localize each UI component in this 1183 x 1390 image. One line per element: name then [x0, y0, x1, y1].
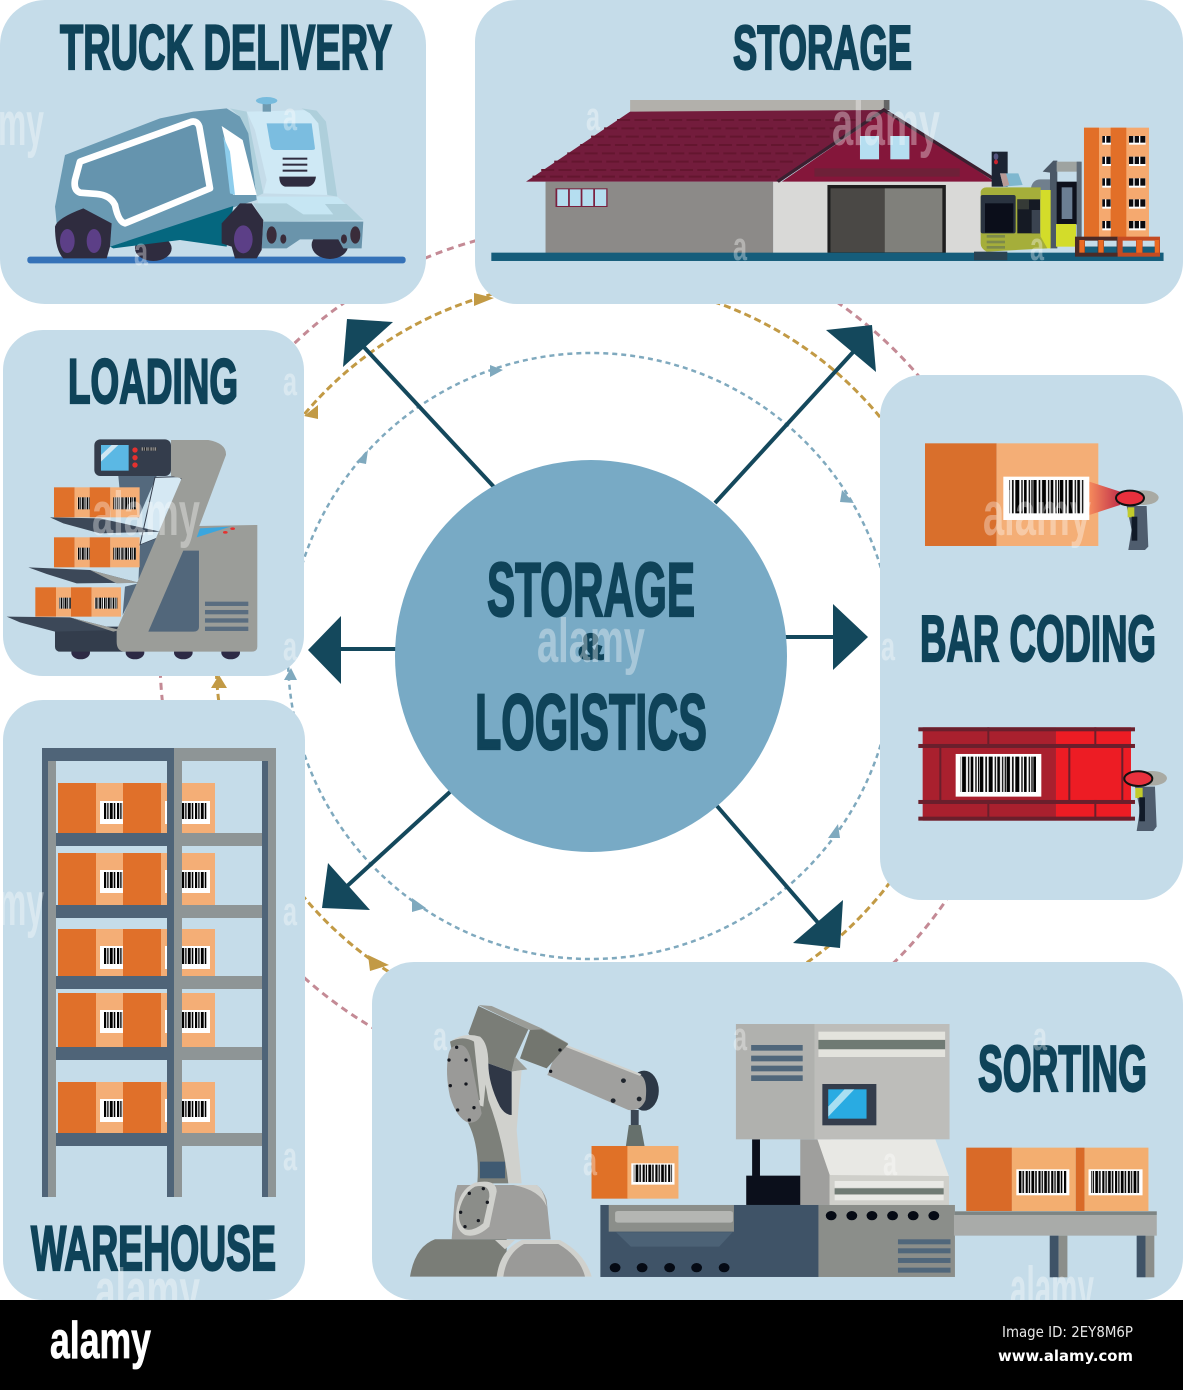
panel background: [372, 962, 1183, 1300]
panel: storage: [475, 0, 1183, 304]
heading: truck delivery: TRUCK DELIVERY: [60, 13, 392, 83]
arrow: to bar coding: [785, 604, 868, 670]
arrow: to warehouse: [322, 791, 451, 910]
panel: bar coding: [880, 375, 1183, 900]
watermarks: alamy: [95, 1257, 200, 1326]
arrow: to loading: [308, 616, 397, 684]
watermarks: a: [283, 1135, 297, 1179]
footer url: www.alamy.com: [998, 1347, 1133, 1365]
watermarks: my: [0, 90, 44, 159]
icon: autonomous truck: [27, 97, 406, 263]
watermarks: a: [883, 1140, 897, 1184]
central hub: [395, 460, 787, 852]
footer logo: alamy: [50, 1312, 151, 1370]
text: alamy: [1010, 1255, 1094, 1324]
watermarks: alamy: [983, 480, 1091, 549]
icon: sorting machine: [600, 1024, 955, 1277]
hub title: &: [578, 626, 604, 667]
arrow: to truck delivery: [343, 319, 494, 487]
watermarks: a: [881, 625, 895, 669]
heading: warehouse: WAREHOUSE: [31, 1214, 276, 1284]
icon: robot arm body: [410, 1005, 592, 1277]
panel background: [3, 330, 304, 676]
panel background: [475, 0, 1183, 304]
icon: box held by robot: [592, 1146, 678, 1199]
watermarks: a: [586, 95, 600, 139]
watermarks: alamy: [92, 480, 200, 549]
watermarks: my: [0, 870, 44, 939]
icon: red container being scanned: [918, 727, 1167, 831]
watermarks: alamy: [537, 607, 645, 676]
icon: warehouse building: [491, 100, 1164, 261]
panel: loading: [3, 330, 304, 676]
panel background: [880, 375, 1183, 900]
watermarks: a: [283, 360, 297, 404]
watermarks: a: [1030, 225, 1044, 269]
watermarks: alamy: [832, 90, 940, 159]
watermarks: a: [283, 625, 297, 669]
watermarks: a: [283, 95, 297, 139]
icon: robot forearm and gripper: [547, 1043, 659, 1146]
footer bar: [0, 1300, 1183, 1390]
hub title: [475, 548, 707, 766]
heading: storage: STORAGE: [733, 14, 912, 83]
icon: forklift: [974, 152, 1082, 260]
arrow: to sorting: [717, 806, 843, 948]
arrow: to storage: [715, 325, 876, 503]
hub title: STORAGE: [487, 548, 695, 633]
icon: loading machine with boxes: [7, 439, 257, 659]
watermarks: a: [733, 1015, 747, 1059]
watermarks: a: [433, 1015, 447, 1059]
heading: loading: LOADING: [68, 347, 238, 417]
footer image id: Image ID: 2EY8M6P: [1002, 1323, 1133, 1341]
panel background: [3, 700, 305, 1300]
icon: shelving rack with boxes: [42, 748, 276, 1197]
dashed orbit rings: [160, 225, 1022, 1087]
hub title: LOGISTICS: [475, 677, 707, 766]
orbit plane markers: [211, 293, 854, 971]
watermarks: a: [134, 230, 148, 274]
panel: warehouse: [3, 700, 305, 1300]
icon: roller conveyor with boxes: [954, 1148, 1157, 1277]
watermarks: a: [583, 1140, 597, 1184]
watermarks: a: [283, 890, 297, 934]
watermarks: a: [1033, 1015, 1047, 1059]
panel: sorting: [372, 962, 1183, 1300]
panel: truck delivery: [0, 0, 426, 304]
watermarks: a: [733, 225, 747, 269]
icon: box being scanned: [925, 443, 1159, 550]
panel background: [0, 0, 426, 304]
icon: stacked boxes tower on pallet: [1075, 128, 1160, 257]
